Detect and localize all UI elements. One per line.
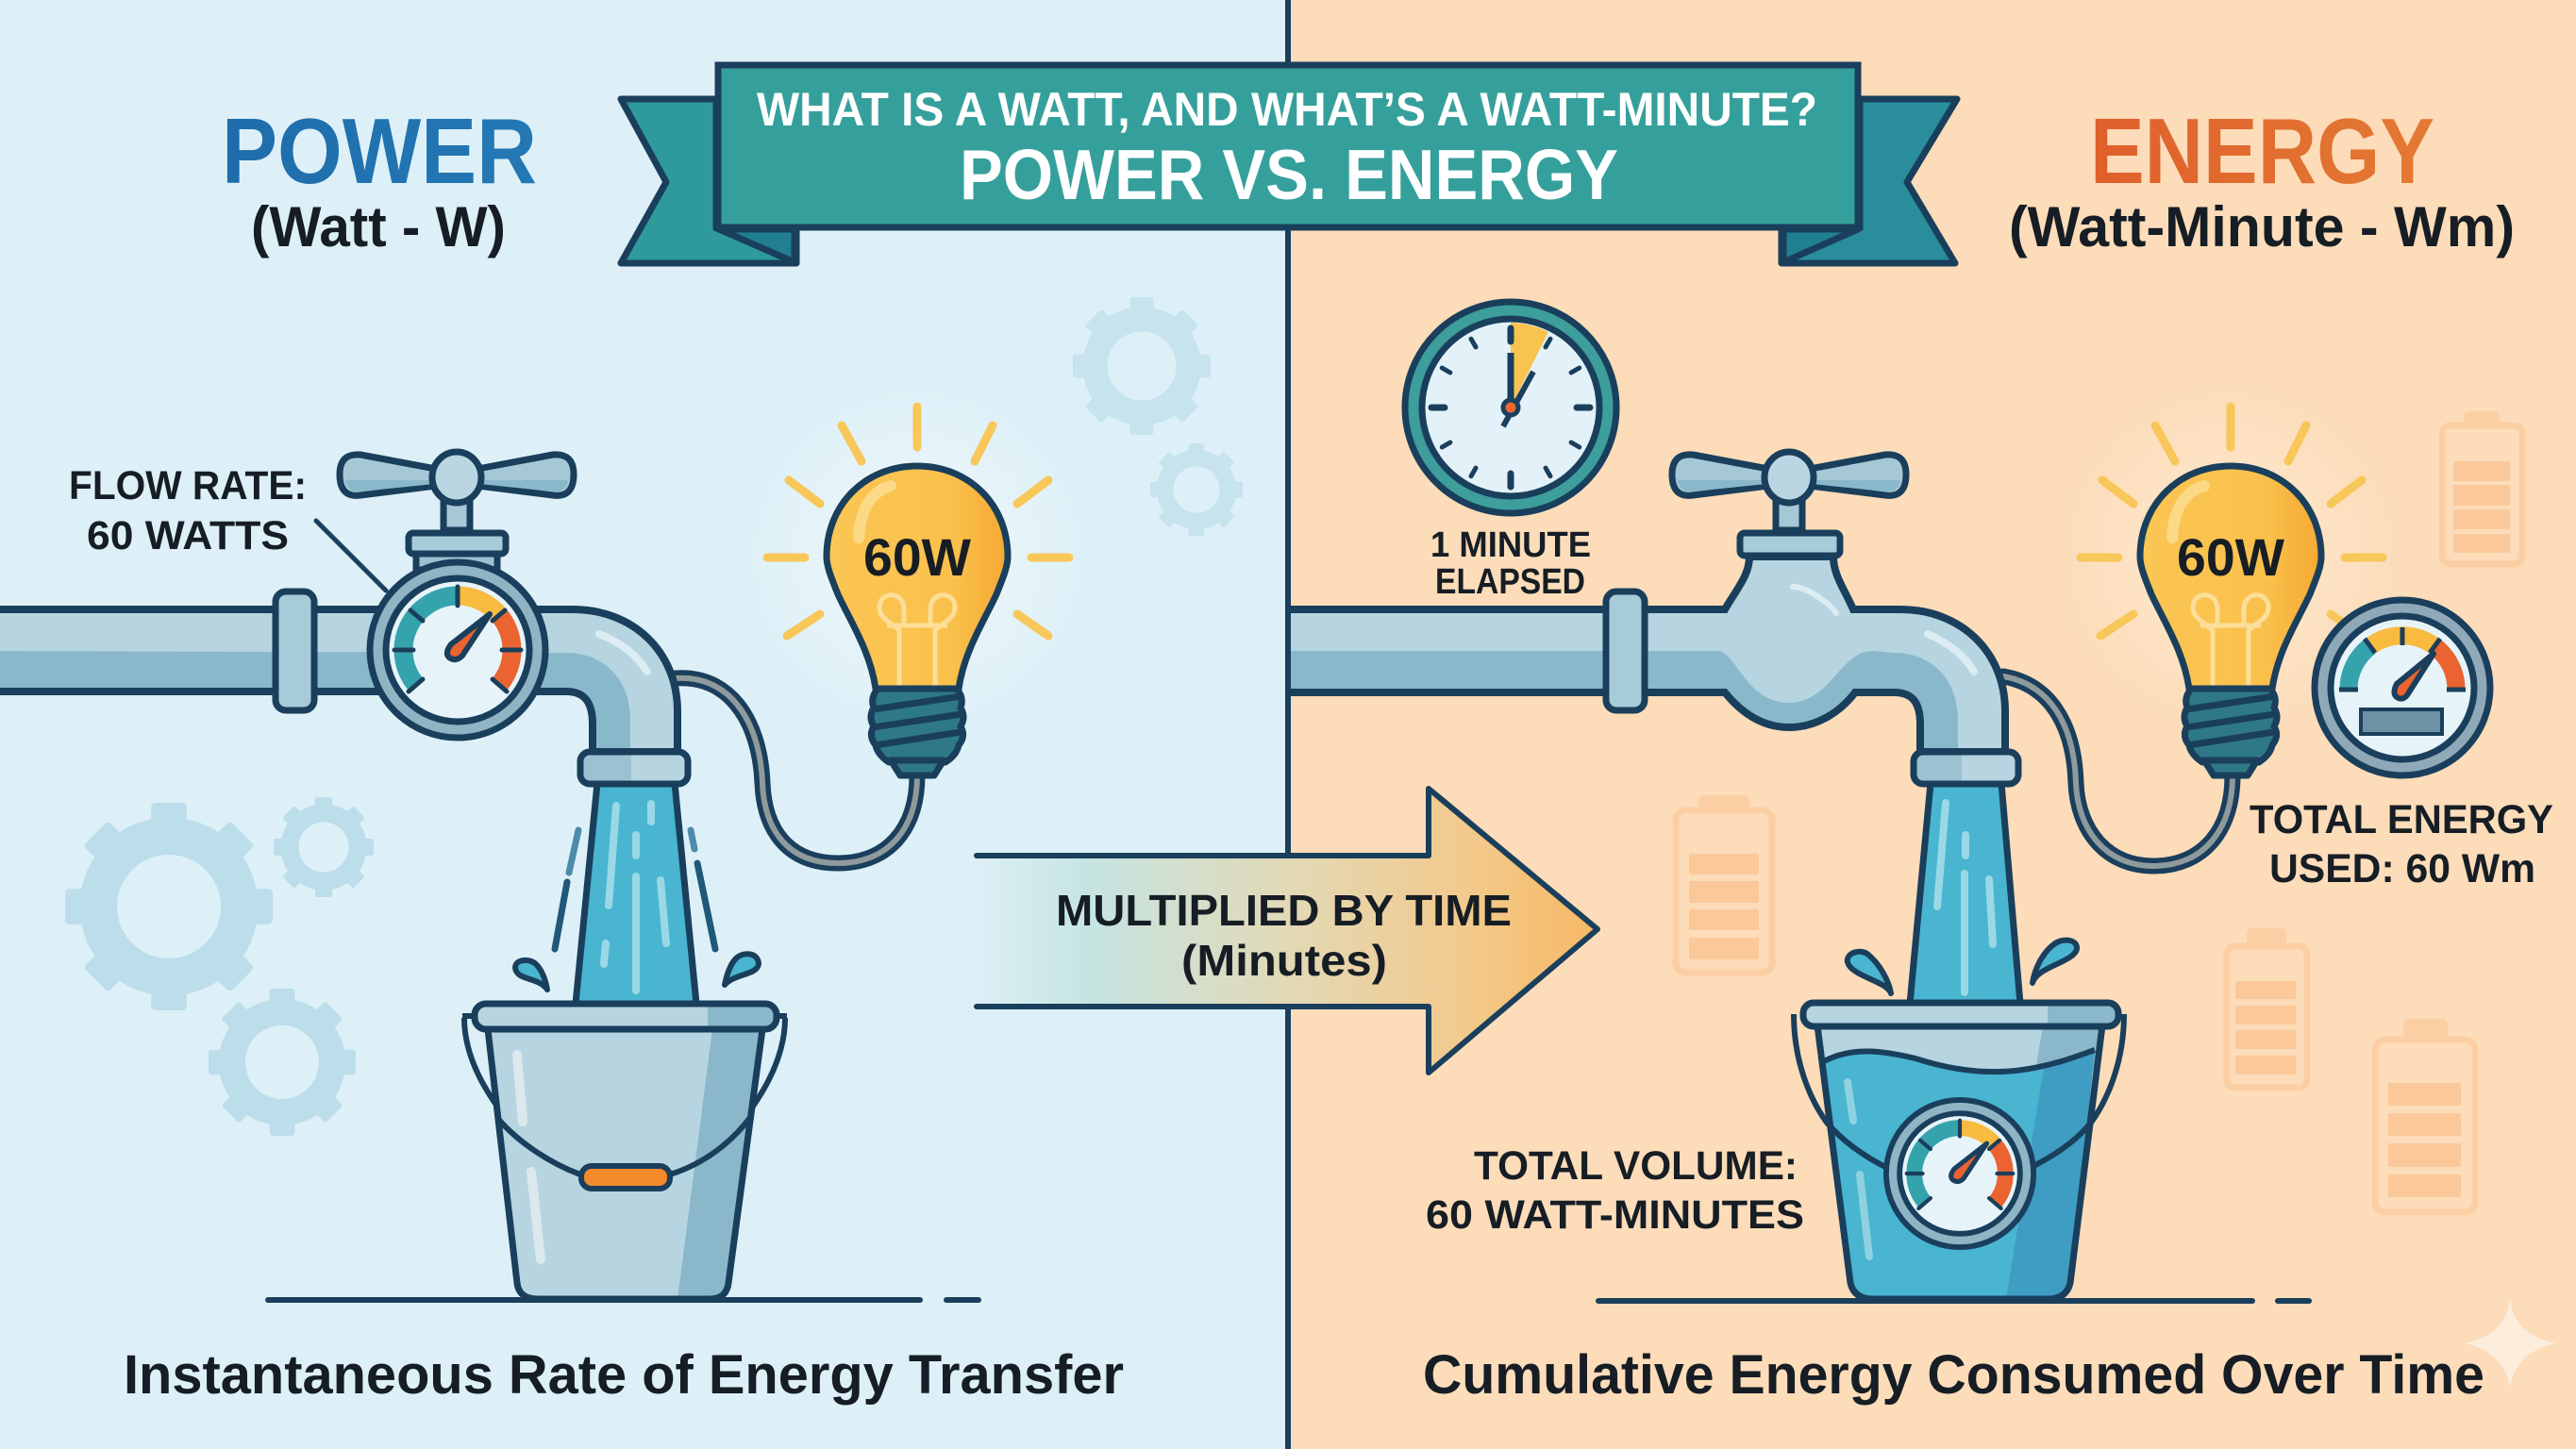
energy: bulb rays [2081,407,2383,636]
power: water stream [576,783,696,1004]
bucket handle [1794,1014,2124,1168]
energy: pipe and faucet [1291,452,2018,784]
power: pipe and faucet [0,452,688,784]
energy: elapsed label: ELAPSED [1435,562,1585,602]
gauge display [2361,709,2442,734]
battery 3 [2227,928,2307,1088]
energy: cord [2003,676,2233,866]
bonnet [416,551,497,570]
power: flow rate callout: FLOW RATE: [69,463,307,508]
pipe collar [1606,591,1645,710]
power: flow gauge [370,562,545,738]
bucket rim [475,1004,777,1029]
subheading: watt-minute: (Watt-Minute - Wm) [2009,195,2515,258]
power: flow rate callout: 60 WATTS [87,513,289,558]
arrow: multiplied by time [977,789,1597,1073]
arrow: multiplied by time: (Minutes) [1181,936,1387,985]
power: flow rate callout [69,463,386,591]
energy: total energy label: TOTAL ENERGY [2250,797,2553,842]
energy: elapsed label: 1 MINUTE [1430,525,1591,565]
title ribbon [621,65,1957,263]
outlet nut [1914,752,2018,784]
arrow: multiplied by time: MULTIPLIED BY TIME [1056,886,1512,935]
energy: total energy label: USED: 60 Wm [2269,846,2535,891]
valve handle [340,452,574,530]
battery 1 [1676,795,1772,973]
bucket gauge [1886,1100,2033,1247]
energy: bucket [1794,1003,2124,1299]
bucket bail [497,1115,752,1174]
sparkle [2465,1299,2556,1389]
power: bulb label: 60W [863,527,971,587]
outlet nut [580,752,688,784]
pipe collar [276,591,314,710]
valve handle [1672,452,1906,530]
caption: power: Instantaneous Rate of Energy Transfer [124,1344,1124,1406]
bucket water [1824,1050,2095,1299]
energy: total volume label [1426,1143,1804,1238]
energy: bulb [2140,466,2321,775]
energy: total energy gauge [2315,600,2490,775]
energy: total volume label: 60 WATT-MINUTES [1426,1192,1804,1238]
orange grip [581,1166,670,1189]
panel: energy background [1289,0,2576,1449]
energy: elapsed label [1430,525,1591,602]
power: splash lines and drops [515,830,759,990]
centre divider [1285,0,1291,1449]
power: bulb rays [767,407,1069,636]
bucket rim [1803,1003,2118,1026]
energy: drops [1848,941,2077,993]
power: bulb [827,466,1008,775]
background gears: power side [65,297,1243,1136]
left bulb glow [738,377,1096,736]
caption: energy: Cumulative Energy Consumed Over Time [1423,1344,2484,1406]
panel: power background [0,0,1289,1449]
title line 2: POWER VS. ENERGY [960,135,1618,214]
energy: bulb label: 60W [2177,527,2284,587]
power: bucket [462,1004,787,1299]
power: cord [676,678,917,863]
energy: water stream [1910,783,2020,1004]
bonnet [1740,533,1840,556]
ribbon body [718,65,1858,227]
energy: total volume label: TOTAL VOLUME: [1474,1143,1798,1189]
energy: ground line [1598,1298,2309,1304]
heading: energy: ENERGY [2090,99,2434,203]
energy: total energy label [2250,797,2553,891]
right bulb glow [2051,377,2410,736]
title line 1: WHAT IS A WATT, AND WHAT’S A WATT-MINUTE? [757,83,1817,136]
subheading: watt: (Watt - W) [251,195,506,258]
power: ground line [268,1297,979,1303]
battery 2 [2442,411,2522,564]
energy: clock [1405,302,1616,513]
heading: power: POWER [222,99,537,203]
background batteries: energy side [1676,411,2522,1212]
ribbon tails [621,99,1957,263]
battery 4 [2375,1019,2475,1212]
